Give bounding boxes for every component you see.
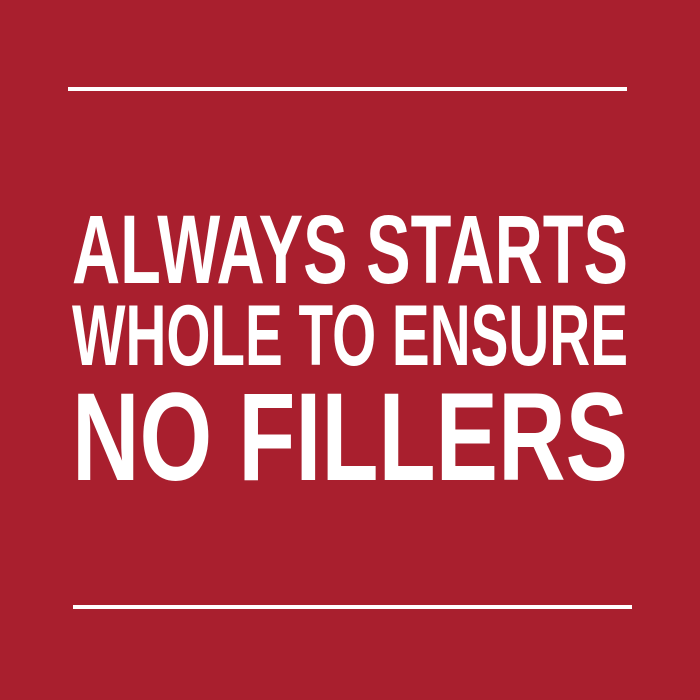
headline text: [72, 195, 628, 507]
